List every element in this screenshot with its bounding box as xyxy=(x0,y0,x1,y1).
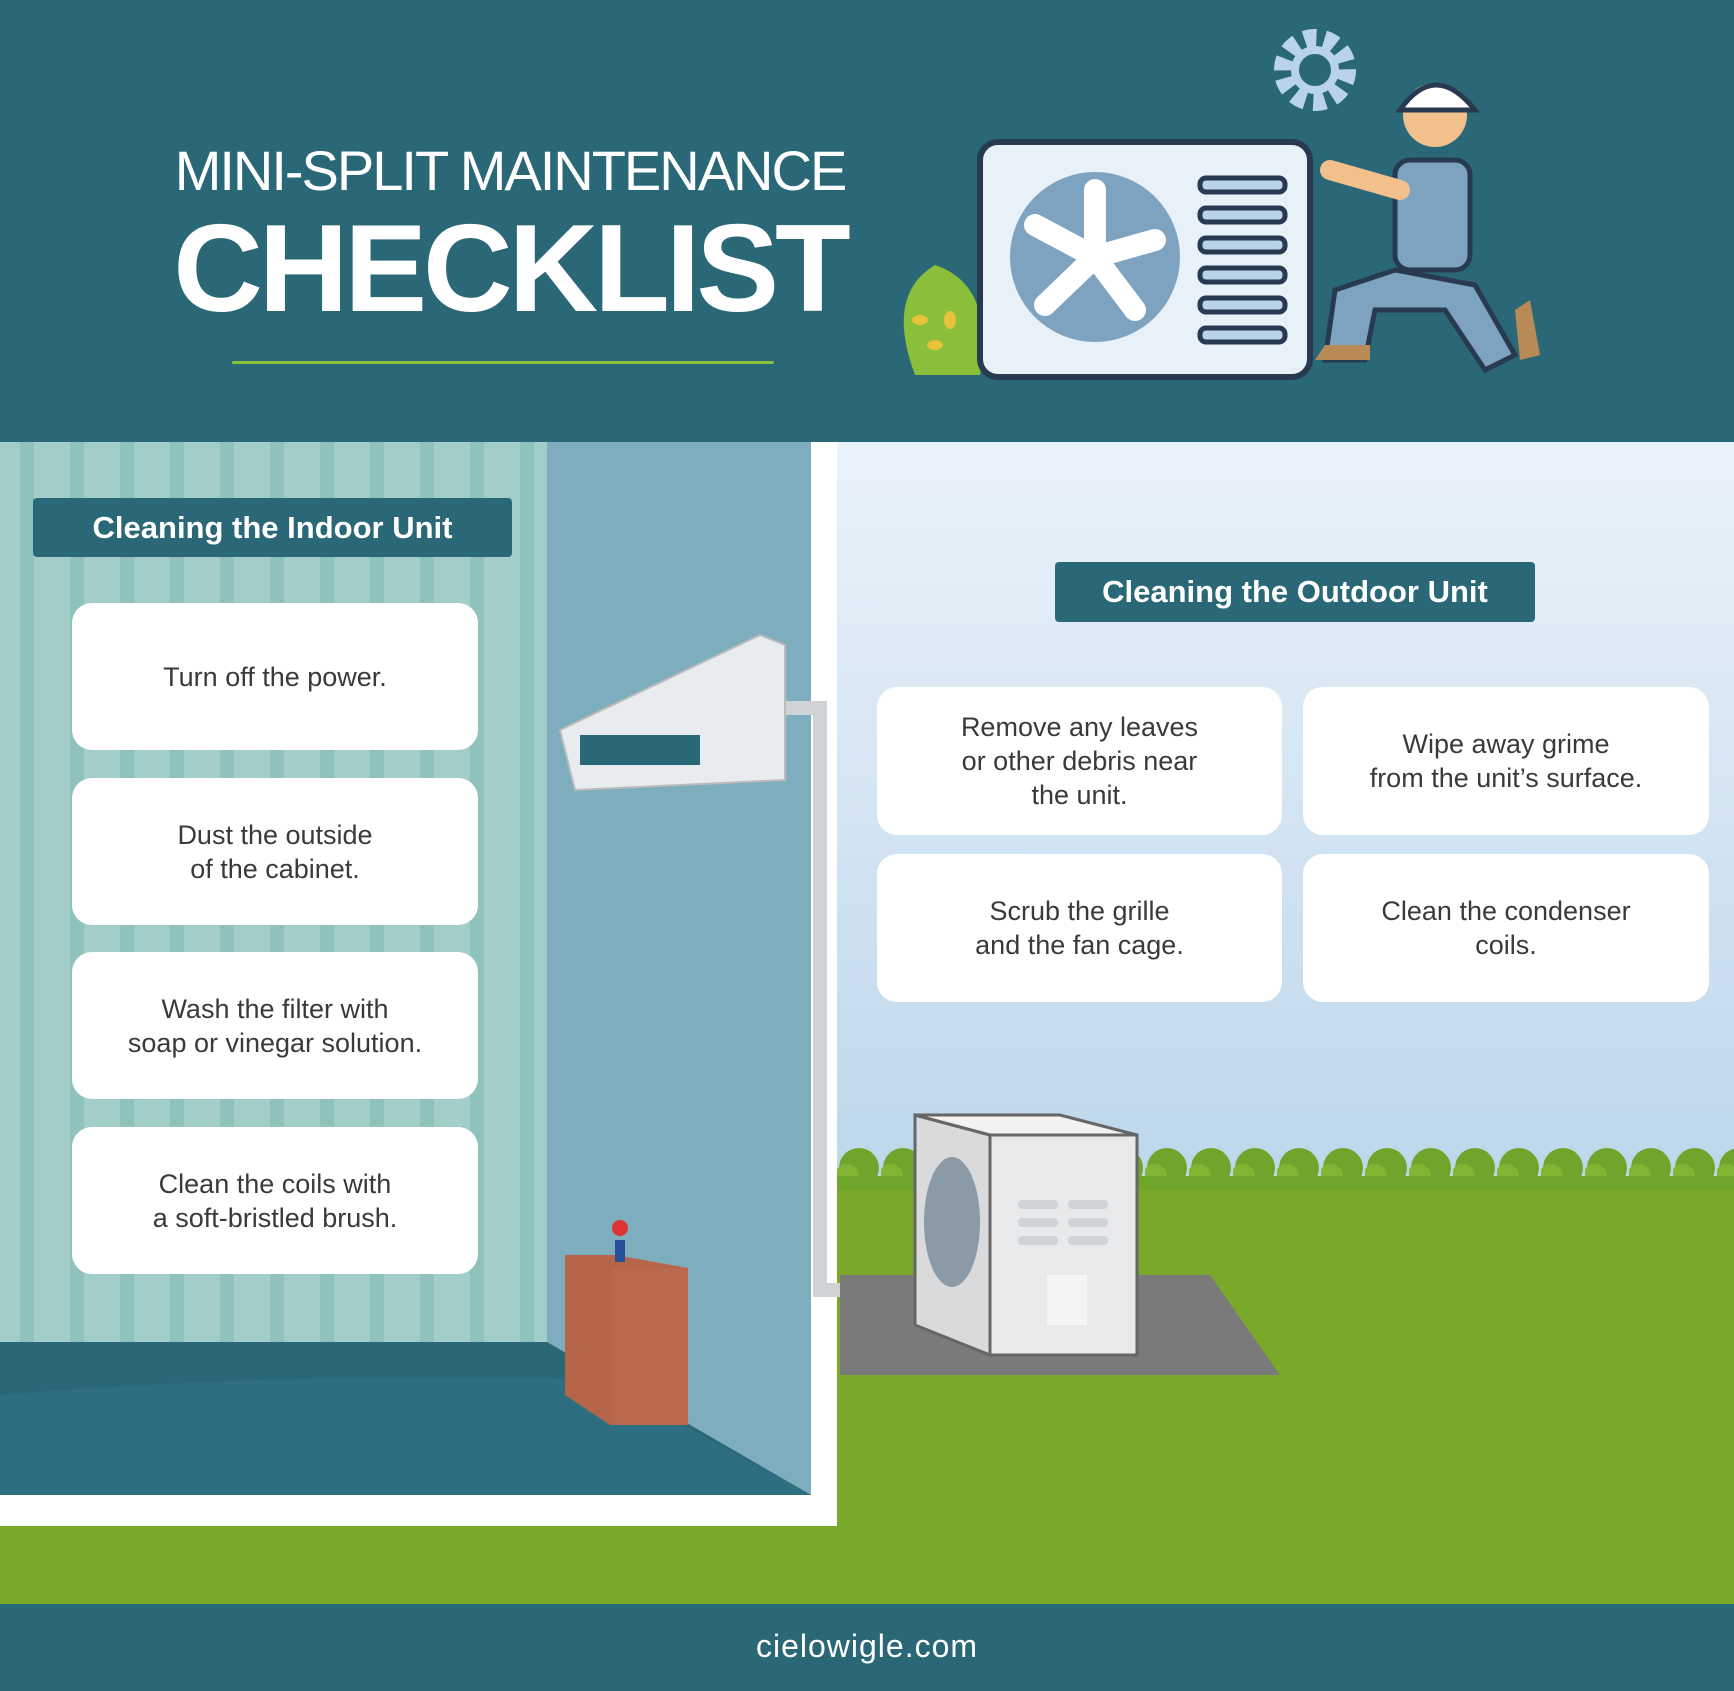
card: outdoor 4: Clean the condenser xyxy=(1381,896,1631,926)
card: indoor 1 xyxy=(72,603,478,750)
card: outdoor 2: Wipe away grime xyxy=(1402,729,1610,759)
green underline xyxy=(232,361,774,364)
card: outdoor 2 xyxy=(1303,687,1709,835)
card: outdoor 4: coils. xyxy=(1475,930,1537,960)
card: indoor 3 xyxy=(72,952,478,1099)
card: indoor 2: Dust the outside xyxy=(177,820,373,850)
card: indoor 2 xyxy=(72,778,478,925)
card: indoor 3: soap or vinegar solution. xyxy=(128,1028,422,1058)
card: outdoor 1: the unit. xyxy=(1031,780,1128,810)
card: outdoor 4 xyxy=(1303,854,1709,1002)
title xyxy=(173,139,850,338)
heading: indoor xyxy=(33,498,512,557)
card: outdoor 3 xyxy=(877,854,1282,1002)
heading: outdoor xyxy=(1055,562,1535,622)
card: outdoor 2: from the unit’s surface. xyxy=(1370,763,1642,793)
card: indoor 2: of the cabinet. xyxy=(190,854,360,884)
card: indoor 1: Turn off the power. xyxy=(163,662,387,692)
card: indoor 3: Wash the filter with xyxy=(161,994,389,1024)
card: indoor 4: a soft-bristled brush. xyxy=(153,1202,397,1232)
title: MINI-SPLIT MAINTENANCE xyxy=(175,139,845,202)
card: indoor 4 xyxy=(72,1127,478,1274)
card: outdoor 1: or other debris near xyxy=(962,746,1197,776)
header illustration: outdoor unit with technician xyxy=(904,29,1540,380)
card: outdoor 3: Scrub the grille xyxy=(989,896,1170,926)
card: outdoor 1: Remove any leaves xyxy=(961,712,1198,742)
card: indoor 4: Clean the coils with xyxy=(159,1168,391,1198)
heading: indoor: Cleaning the Indoor Unit xyxy=(93,510,452,544)
title: CHECKLIST xyxy=(173,200,847,338)
footer text: cielowigle.com xyxy=(756,1628,978,1664)
card: outdoor 3: and the fan cage. xyxy=(975,930,1184,960)
card: outdoor 1 xyxy=(877,687,1282,835)
heading: outdoor: Cleaning the Outdoor Unit xyxy=(1102,574,1488,609)
